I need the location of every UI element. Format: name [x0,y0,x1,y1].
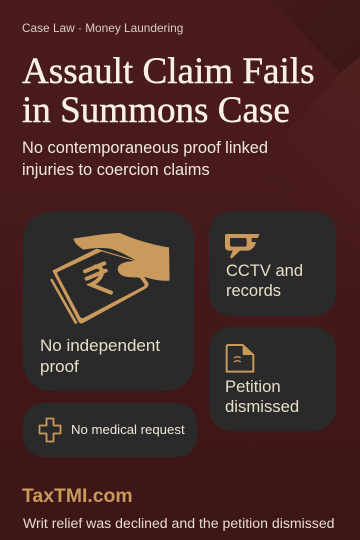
label [40,336,160,376]
label: dismissed [225,397,299,416]
icon: hand with rupee notes [50,233,170,324]
subtitle [22,138,268,178]
label [226,262,303,300]
icon: CCTV camera [225,234,260,259]
label: No independent [40,336,160,355]
title: in Summons Case [22,90,290,131]
icon glyph: rupee [85,263,111,293]
panel: petition dismissed [209,327,336,431]
brand: TaxTMI.com [22,485,133,507]
icon: medical cross [38,418,62,442]
panel: no independent proof [23,211,194,391]
label: No medical request [71,422,185,437]
title: Assault Claim Fails [22,51,315,92]
label [225,377,299,416]
panel: CCTV and records [209,211,336,316]
panel: no medical request [23,403,197,457]
icon: document [226,344,254,373]
title [22,51,315,131]
footer text: Writ relief was declined and the petition dismissed [23,515,335,531]
label: records [226,282,281,300]
label: proof [40,357,79,376]
label: Petition [225,377,281,396]
subtitle: No contemporaneous proof linked [22,138,268,156]
label: CCTV and [226,262,303,280]
eyebrow: Case Law · Money Laundering [22,21,183,35]
subtitle: injuries to coercion claims [22,160,210,178]
